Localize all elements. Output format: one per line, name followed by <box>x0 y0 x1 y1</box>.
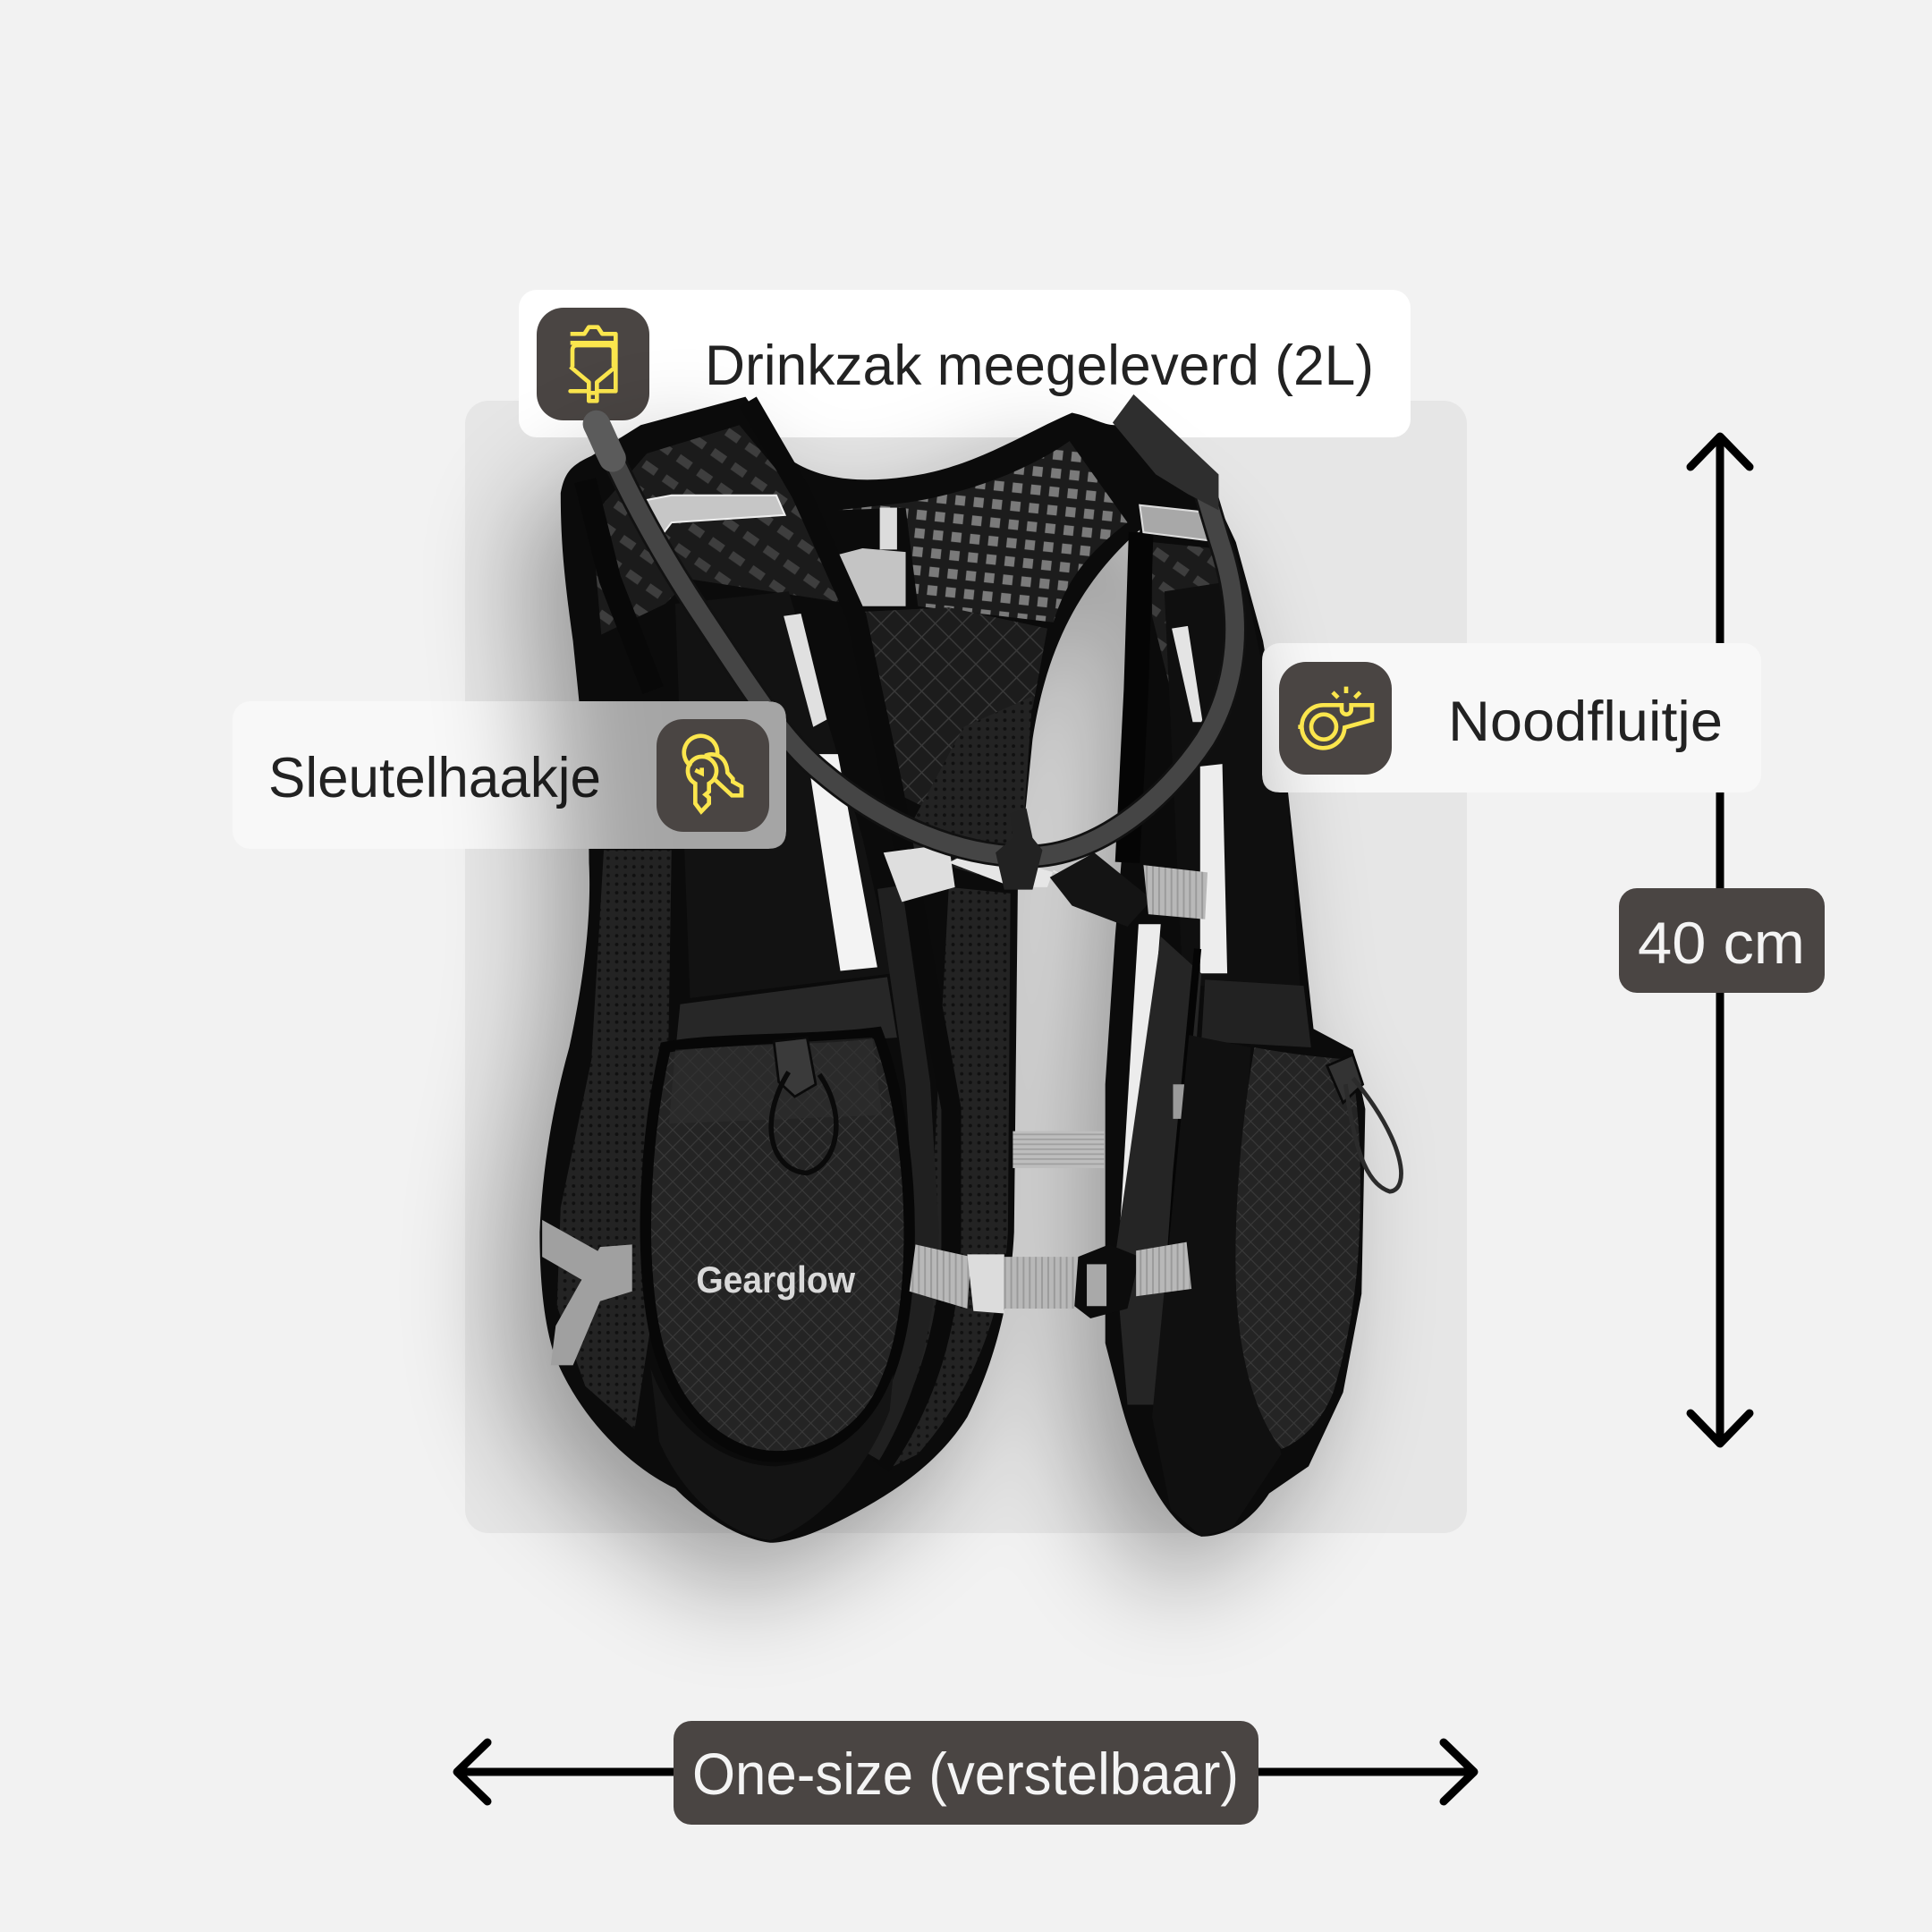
shoulder reflector right <box>1140 505 1223 542</box>
back panel ripstop <box>866 607 1047 805</box>
waist strap center <box>1004 1257 1078 1309</box>
chest strap left <box>884 844 955 902</box>
panel: product backdrop <box>465 401 1467 1533</box>
right reflective tip <box>1165 1361 1175 1419</box>
chest strap center <box>949 851 1109 900</box>
right inner column <box>1115 936 1201 1404</box>
vest drop shadow <box>505 444 1331 1589</box>
cord toggle left <box>774 1038 816 1097</box>
right pocket dark side <box>1152 1035 1282 1537</box>
right front white stripe <box>1200 764 1227 973</box>
back mesh right <box>838 441 1128 623</box>
waist buckle window <box>1087 1264 1106 1306</box>
label: Noodfluitje: Noodfluitje <box>1448 691 1723 753</box>
icon: water bladder <box>537 308 649 420</box>
right zipper <box>1172 626 1203 722</box>
middle strap <box>1013 1131 1104 1168</box>
tube clip <box>996 809 1042 890</box>
right front panel <box>1165 579 1300 986</box>
left side strap <box>591 504 637 627</box>
left waist strap <box>542 1220 632 1365</box>
right cord loop <box>1345 1078 1402 1191</box>
callout: Noodfluitje card <box>1262 643 1761 792</box>
callout: Sleutelhaakje card <box>233 701 786 849</box>
tube valve <box>1113 394 1218 510</box>
icon: keys <box>657 719 769 832</box>
left front panel <box>769 592 789 849</box>
waist strap right <box>1136 1242 1191 1296</box>
chest buckle <box>1050 852 1152 927</box>
waist strap left <box>910 1244 971 1309</box>
pocket top mesh band <box>676 977 897 1039</box>
arrow: height dimension <box>1690 436 1750 1444</box>
callout: Drinkzak <box>519 290 1411 437</box>
left shoulder strap <box>748 402 952 1466</box>
icon: whistle <box>1279 662 1392 775</box>
shoulder reflector left <box>632 496 785 549</box>
right inner strap <box>1128 532 1141 862</box>
waist buckle <box>1074 1244 1140 1318</box>
left outer mesh <box>557 851 672 1429</box>
back mesh left <box>591 425 851 634</box>
back loop tab <box>880 508 897 549</box>
dimension pill: 40 cm <box>1619 888 1825 993</box>
right back mesh strip <box>1152 542 1233 690</box>
label: Sleutelhaakje: Sleutelhaakje <box>268 747 601 809</box>
vest silhouette <box>539 397 1365 1543</box>
label: Drinkzak: Drinkzak meegeleverd (2L) <box>705 335 1374 397</box>
brand: Gearglow: Gearglow <box>696 1259 856 1301</box>
drink tube <box>595 419 1235 856</box>
back panel lower mesh <box>913 701 1032 878</box>
left zipper <box>784 614 826 727</box>
dimension pill: One-size: One-size (verstelbaar) <box>692 1741 1239 1807</box>
arrow: width dimension <box>457 1742 1474 1801</box>
center lower mesh <box>894 887 1011 1466</box>
right upper pocket mesh <box>1201 979 1311 1047</box>
right pocket <box>1235 1047 1360 1449</box>
thin white stripe <box>1119 924 1161 1247</box>
waist strap slider <box>967 1254 1004 1314</box>
left front white stripe <box>807 754 877 971</box>
dimension pill: One-size <box>674 1721 1258 1825</box>
right toggle <box>1327 1055 1363 1103</box>
product: hydration vest <box>539 394 1402 1543</box>
left strap inner band <box>869 887 927 1454</box>
right reflective tab <box>1173 1084 1185 1119</box>
cord loop left <box>771 1072 836 1173</box>
left pocket bottom band <box>650 1368 894 1540</box>
left pocket <box>646 1032 910 1456</box>
pocket gather <box>675 1038 873 1052</box>
neck gap <box>835 548 906 606</box>
right cord <box>1165 949 1198 1343</box>
chest webbing right <box>1143 865 1208 919</box>
dimension pill: 40 cm: 40 cm <box>1638 910 1805 976</box>
